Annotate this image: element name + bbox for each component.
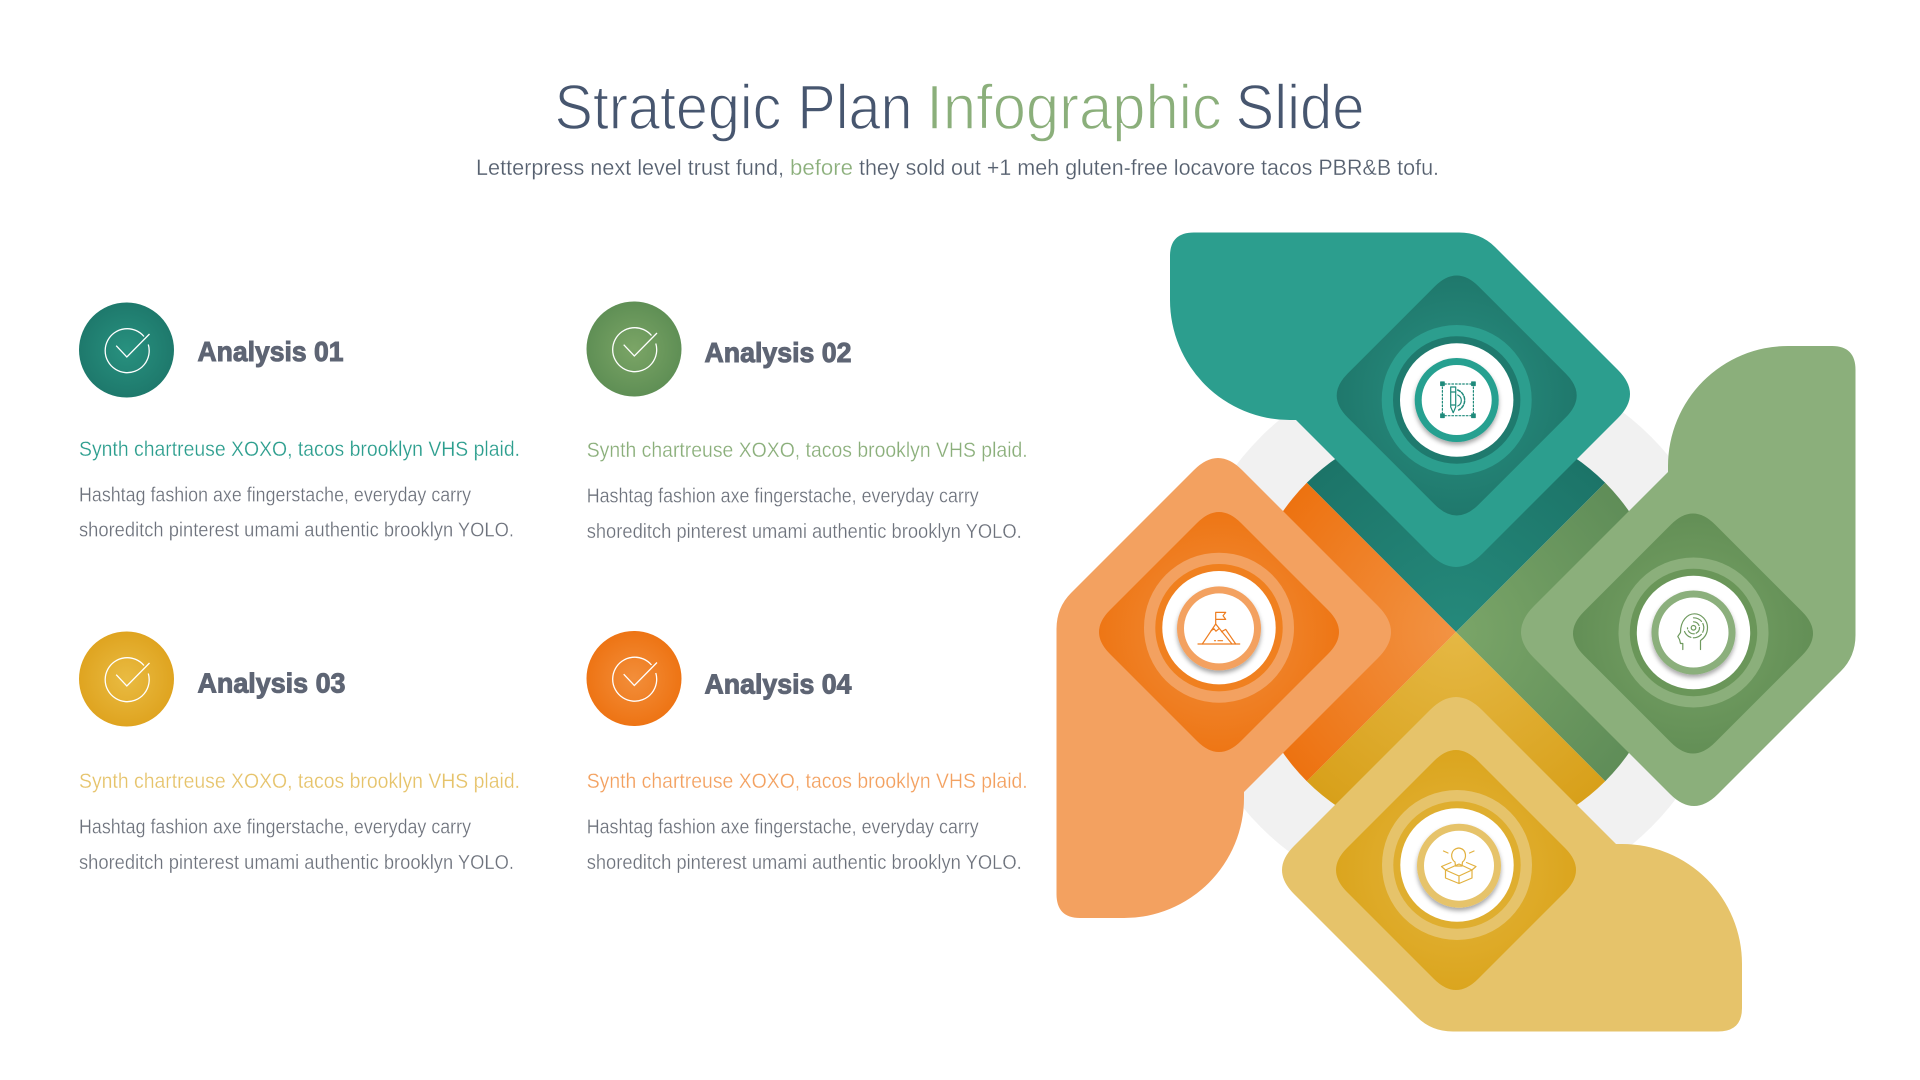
icon: pencil and gear in selection frame — [1441, 382, 1475, 418]
icon: check badge 04 — [586, 631, 682, 726]
medallion: orange with mountain icon — [1144, 553, 1294, 703]
icon: box with light bulb — [1442, 848, 1476, 884]
medallion: teal with design icon — [1382, 325, 1532, 475]
title: Strategic Plan — [554, 73, 912, 143]
panel: analysis 03 — [79, 632, 520, 874]
body text 04 — [587, 816, 1022, 874]
pinwheel diagram — [1056, 232, 1856, 1032]
highlight line 04: Synth chartreuse XOXO, tacos brooklyn VHS plaid. — [587, 769, 1028, 793]
heading: analysis 04: Analysis 04 — [704, 668, 852, 700]
highlight line 01: Synth chartreuse XOXO, tacos brooklyn VHS plaid. — [79, 437, 520, 461]
subtitle: they sold out +1 meh gluten-free locavore tacos PBR&B tofu. — [859, 155, 1439, 180]
highlight line 03: Synth chartreuse XOXO, tacos brooklyn VHS plaid. — [79, 769, 520, 793]
panel: analysis 04 — [586, 631, 1028, 874]
medallion: green with head icon — [1618, 558, 1768, 708]
heading: analysis 01: Analysis 01 — [198, 336, 344, 367]
body text 04: Hashtag fashion axe fingerstache, everyday carry — [587, 816, 979, 838]
subtitle: before — [790, 155, 853, 180]
body text 01: shoreditch pinterest umami authentic brooklyn YOLO. — [79, 520, 514, 542]
diamond: teal — [1337, 276, 1577, 516]
icon: check badge 02 — [586, 302, 682, 396]
blob: teal petal — [1170, 232, 1630, 567]
body text 02: Hashtag fashion axe fingerstache, everyday carry — [587, 486, 979, 508]
body text 02 — [587, 486, 1022, 543]
blob: orange petal — [1056, 458, 1391, 918]
diamond: green — [1573, 514, 1813, 754]
body text 03: Hashtag fashion axe fingerstache, everyday carry — [79, 816, 471, 838]
body text 02: shoreditch pinterest umami authentic brooklyn YOLO. — [587, 521, 1022, 543]
medallion: yellow with box icon — [1382, 790, 1532, 940]
title: Infographic — [926, 73, 1222, 143]
panel: analysis 01 — [79, 302, 520, 542]
title — [554, 73, 1364, 143]
icon: check badge 03 — [79, 632, 174, 726]
icon: head with maze — [1678, 614, 1708, 650]
body text 01 — [79, 485, 514, 542]
heading: analysis 03: Analysis 03 — [198, 668, 346, 698]
hub: coloured quadrants — [1245, 421, 1667, 843]
body text 01: Hashtag fashion axe fingerstache, everyday carry — [79, 485, 471, 507]
heading: analysis 02: Analysis 02 — [704, 337, 852, 368]
body text 04: shoreditch pinterest umami authentic brooklyn YOLO. — [587, 852, 1022, 874]
icon: mountain with flag — [1198, 612, 1240, 644]
hub: grey ring — [1180, 356, 1732, 908]
panel: analysis 02 — [586, 302, 1028, 543]
title: Slide — [1236, 73, 1364, 143]
blob: yellow petal — [1282, 697, 1742, 1032]
body text 03 — [79, 816, 514, 874]
highlight line 02: Synth chartreuse XOXO, tacos brooklyn VHS plaid. — [587, 438, 1028, 462]
body text 03: shoreditch pinterest umami authentic brooklyn YOLO. — [79, 852, 514, 874]
diamond: orange — [1099, 512, 1339, 752]
diamond: yellow — [1336, 750, 1576, 990]
blob: green petal — [1521, 346, 1856, 806]
subtitle — [476, 155, 1439, 180]
icon: check badge 01 — [79, 302, 174, 398]
subtitle: Letterpress next level trust fund, — [476, 155, 784, 180]
